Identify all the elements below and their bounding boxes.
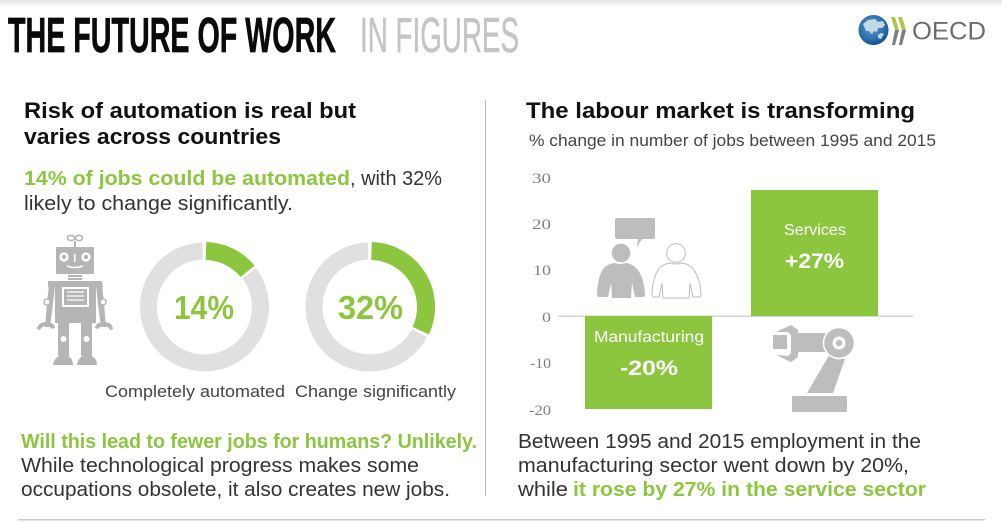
text block: employment: while <box>517 478 568 501</box>
title: THE FUTURE OF WORK <box>8 8 336 63</box>
text block: fewer jobs: occupations obsolete, it also creates new jobs. <box>21 478 450 501</box>
logo: OECD: OECD <box>912 18 986 46</box>
axis labels: 0 <box>542 310 551 326</box>
label: completely automated: Completely automated <box>105 383 285 401</box>
axis labels: -20 <box>529 403 551 419</box>
chart: donut 14% <box>148 251 260 363</box>
text block: 14% of jobs <box>24 167 442 215</box>
text block: employment: manufacturing sector went down by 20%, <box>518 454 909 477</box>
heading: labour market: The labour market is transforming <box>526 98 915 123</box>
axis labels: 10 <box>533 263 551 279</box>
text block: fewer jobs: While technological progress makes some <box>21 454 419 477</box>
bar: services: +27% <box>785 249 844 273</box>
text block: fewer jobs <box>21 430 477 501</box>
heading: risk of automation: Risk of automation is real but <box>24 98 357 123</box>
bar: services: Services <box>784 222 846 239</box>
chart: donut 14%: 14% <box>174 289 234 326</box>
text block: employment <box>517 430 926 501</box>
label: change significantly: Change significantly <box>295 383 457 401</box>
logo: OECD <box>858 15 986 46</box>
icon: service workers <box>597 218 701 298</box>
axis labels <box>529 171 551 419</box>
axis labels: 30 <box>532 171 551 187</box>
bar: manufacturing <box>585 316 712 409</box>
heading: risk of automation: varies across countries <box>24 124 281 149</box>
text block: fewer jobs: Will this lead to fewer jobs for humans? Unlikely. <box>21 430 477 453</box>
icon: robot arm <box>773 325 854 412</box>
chart subtitle: % change in number of jobs between 1995 and 2015 <box>529 132 936 150</box>
text block: employment: Between 1995 and 2015 employment in the <box>518 430 921 453</box>
bar: manufacturing: -20% <box>620 356 678 380</box>
text block: 14% of jobs: likely to change significantly. <box>24 192 293 215</box>
heading: risk of automation <box>24 98 357 149</box>
text block: employment: it rose by 27% in the service sector <box>573 478 926 501</box>
bar chart <box>529 171 913 419</box>
chart: donut 32% <box>314 251 426 363</box>
axis labels: -10 <box>530 356 551 372</box>
icon: robot <box>37 235 113 365</box>
title: IN FIGURES <box>360 8 519 63</box>
chart: donut 32%: 32% <box>338 289 403 326</box>
axis labels: 20 <box>532 217 551 233</box>
panel: risk of automation <box>21 98 477 501</box>
text block: 14% of jobs: , with 32% <box>350 167 442 190</box>
bar: manufacturing: Manufacturing <box>594 329 704 346</box>
bar: services <box>751 190 878 316</box>
text block: 14% of jobs: 14% of jobs could be automated <box>24 167 350 190</box>
panel: labour market <box>517 98 936 501</box>
